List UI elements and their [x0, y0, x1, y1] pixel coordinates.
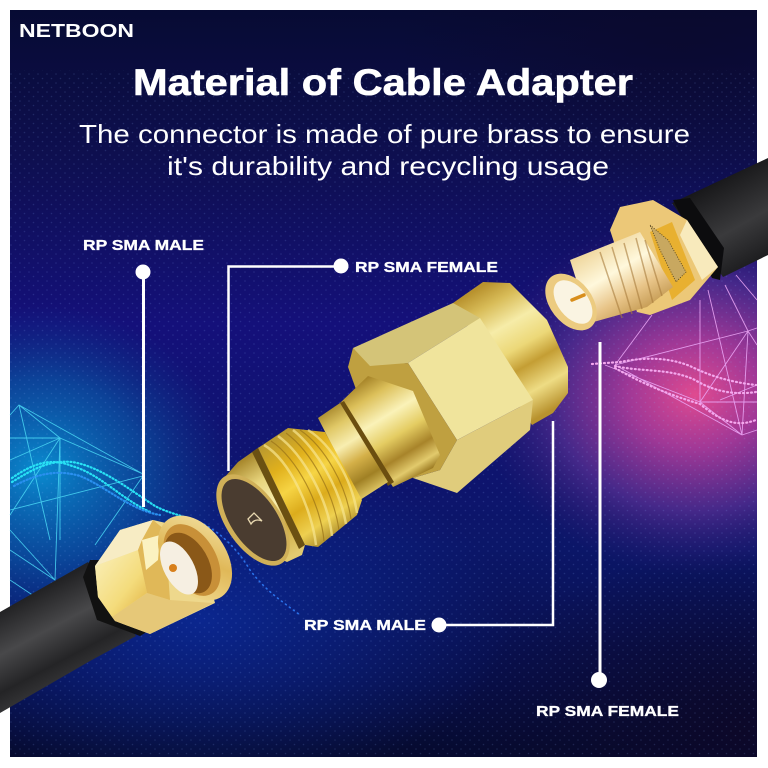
callout: RP SMA female (right): RP SMA FEMALE	[536, 704, 679, 720]
cable: upper right	[672, 158, 768, 277]
subtitle: it's durability and recycling usage	[167, 151, 609, 181]
callout: RP SMA female (centre): RP SMA FEMALE	[355, 260, 498, 276]
front face	[202, 462, 304, 578]
small connector: RP SMA male	[83, 502, 247, 636]
front collar	[224, 448, 305, 562]
step cylinder	[318, 403, 388, 500]
groove	[340, 401, 394, 486]
neck cylinder	[340, 376, 440, 487]
logo: NETBOON: NETBOON	[19, 21, 134, 41]
pink wireframe mesh	[605, 275, 757, 435]
callout: RP SMA male (left)	[83, 238, 204, 507]
rear cylinder	[453, 282, 568, 425]
centre contact	[248, 513, 262, 524]
cyan wireframe mesh	[10, 405, 143, 600]
cyan particle wave	[12, 462, 300, 615]
small connector: RP SMA female	[535, 198, 724, 340]
callout: RP SMA male (centre): RP SMA MALE	[304, 618, 426, 634]
threads	[258, 428, 362, 547]
callout: RP SMA male (left): RP SMA MALE	[83, 238, 204, 254]
hex nut front face	[408, 318, 533, 440]
callout: RP SMA female (right)	[536, 342, 679, 720]
hex nut lower face	[413, 400, 533, 493]
cable: lower left	[0, 562, 136, 713]
pink particle wave	[592, 359, 756, 423]
subtitle: The connector is made of pure brass to ensure	[79, 119, 690, 149]
callout: RP SMA female (centre)	[228, 258, 498, 471]
main adapter	[202, 282, 568, 578]
callout: RP SMA male (centre)	[304, 421, 553, 634]
title: Material of Cable Adapter	[133, 62, 633, 103]
subtitle	[79, 119, 690, 181]
hex nut top face	[353, 303, 480, 368]
hex nut inner ring	[348, 348, 457, 478]
